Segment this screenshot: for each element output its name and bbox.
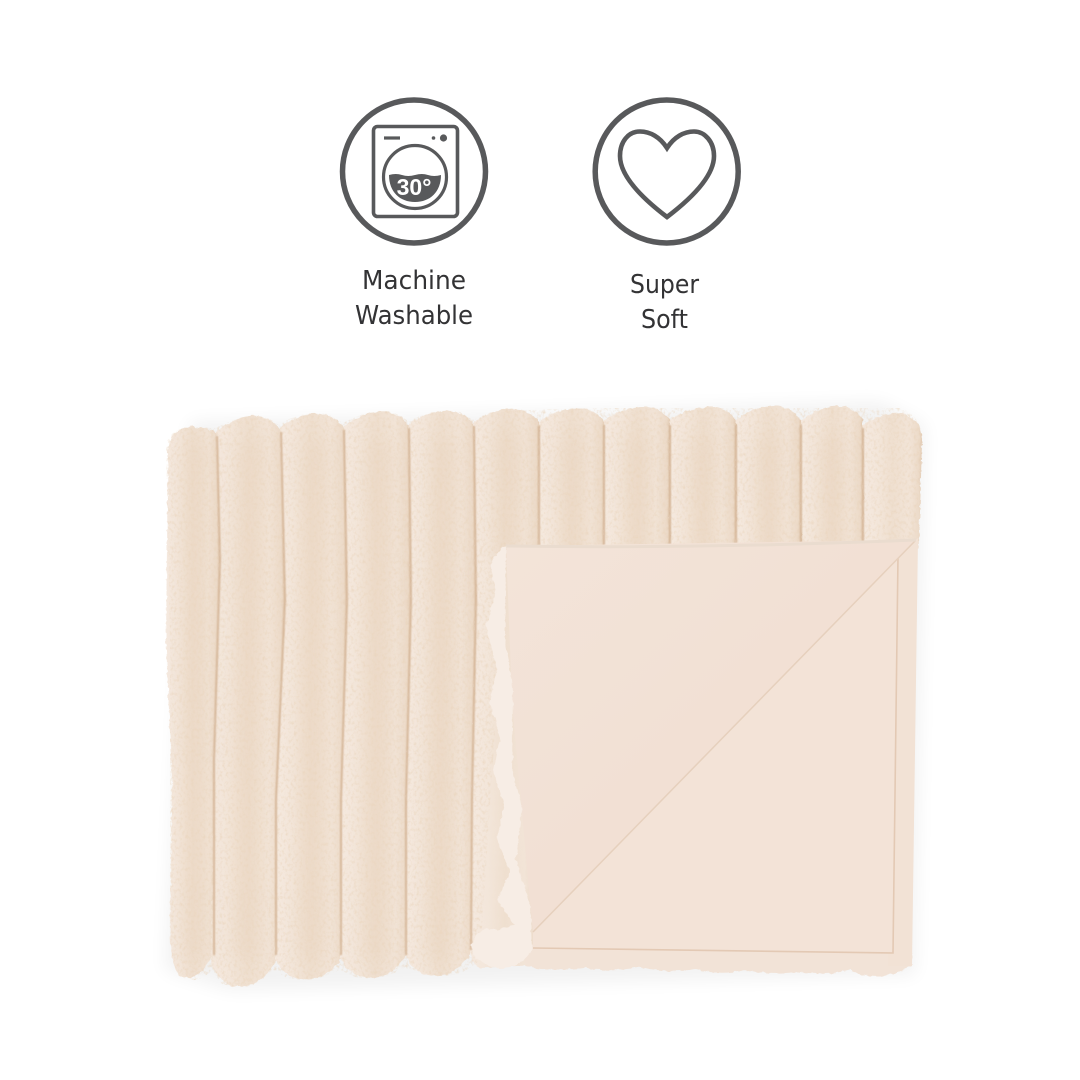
flap top fuzzy edge — [506, 540, 916, 547]
folded corner flap — [506, 540, 916, 932]
rib seams — [214, 425, 863, 955]
icon: washing machine badge: 30° — [397, 174, 431, 200]
icon: heart badge — [595, 100, 738, 243]
blanket drop shadow — [165, 402, 925, 990]
underside panel — [533, 552, 898, 953]
furry ribs, unfolded — [166, 406, 922, 986]
bottom scalloped fur edge — [525, 945, 912, 976]
scalloped fur fringe on flap edge — [471, 546, 532, 968]
tan centre bands of the ribs — [196, 430, 832, 960]
right border of the underside — [888, 538, 918, 966]
fur texture overlay — [160, 400, 930, 990]
fold crease — [533, 541, 915, 932]
label: Super Soft — [630, 270, 699, 335]
label: Machine Washable: Washable — [355, 301, 473, 331]
label: Super Soft: Super — [630, 270, 699, 300]
label: Machine Washable — [355, 266, 473, 331]
underside seam lines — [533, 556, 898, 953]
label: Super Soft: Soft — [641, 305, 688, 335]
infographic canvas — [165, 97, 923, 988]
blanket photo illustration — [160, 400, 930, 990]
icon: washing machine badge — [342, 100, 486, 243]
label: Machine Washable: Machine — [362, 266, 466, 296]
